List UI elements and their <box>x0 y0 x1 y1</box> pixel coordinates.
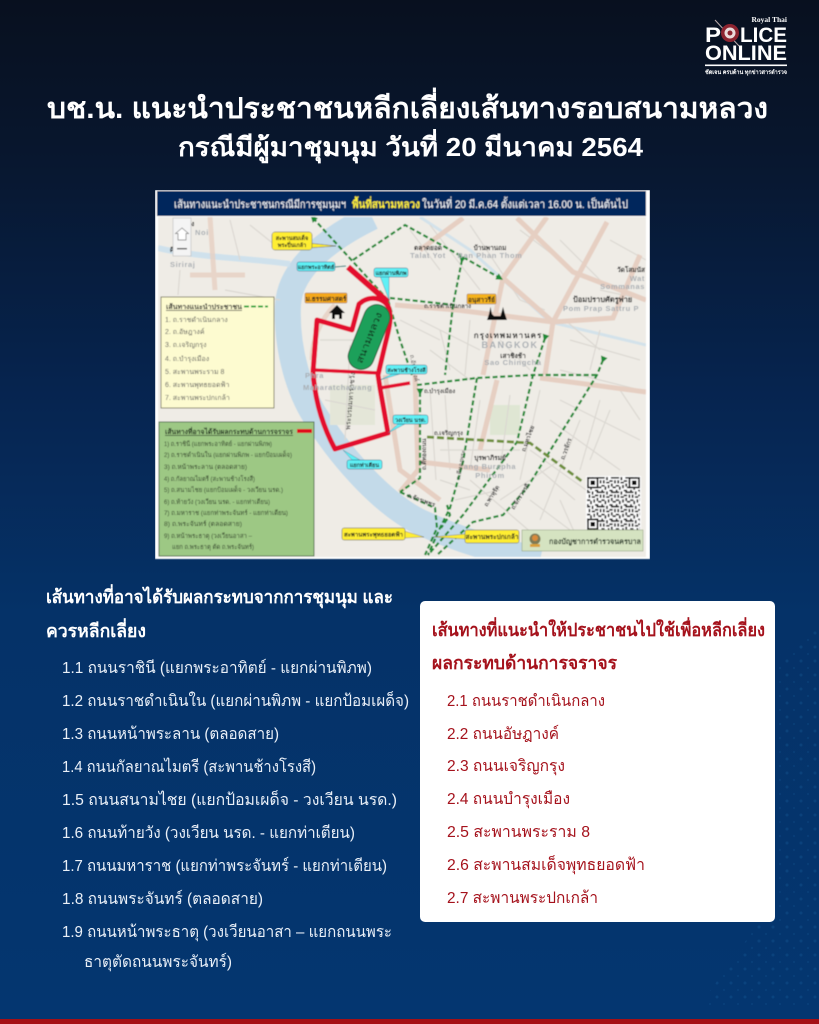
title <box>47 87 768 164</box>
map place names: ถ.มหาไชย <box>519 424 536 453</box>
logo: Royal Thai Police Online: LICE <box>740 24 787 47</box>
callout: Memorial bridge: สะพานพระพุทธยอดฟ้า <box>344 530 403 538</box>
legend: affected routes: แยก ถ.พระธาตุ ตัด ถ.พระจันทร์) <box>172 543 254 551</box>
legend: affected routes: 5) ถ.สนามไชย (แยกป้อมเผด็จ - วงเวียน นรด.) <box>164 485 283 494</box>
map place names: ศิริราช <box>170 246 190 254</box>
list of affected roads: 1.9 ถนนหน้าพระธาตุ (วงเวียนอาสา – แยกถนนพระ <box>62 923 392 942</box>
label: monument <box>467 294 496 304</box>
list of recommended roads: 2.3 ถนนเจริญกรุง <box>447 758 565 776</box>
legend: affected routes: 2) ถ.ราชดำเนินใน (แยกผ่านพิภพ - แยกป้อมเผด็จ) <box>164 450 292 459</box>
list of recommended roads: 2.1 ถนนราชดำเนินกลาง <box>447 693 605 710</box>
affected routes: red <box>313 267 410 449</box>
zoom controls <box>173 218 191 256</box>
map place names: ถ.พาหุรัด <box>482 484 501 508</box>
map place names: ถ.เจริญกรุง <box>434 429 463 437</box>
callout: Phra Pinklao bridge north: พระปิ่นเกล้า <box>277 241 306 249</box>
heading: affected routes <box>46 584 393 641</box>
panel: recommended routes card <box>420 601 775 922</box>
map place names: ถ.ตีทองพระ <box>454 449 467 480</box>
callout: Phra Athit junction: แยกพระอาทิตย์ <box>298 264 334 271</box>
icon: police seal <box>715 20 739 46</box>
map header bar: ในวันที่ 20 มี.ค.64 ตั้งแต่เวลา 16.00 น. เป็นต้นไป <box>422 196 628 211</box>
legend: recommended routes: 6. สะพานพุทธยอดฟ้า <box>165 381 229 389</box>
callout: Phan Phiphop junction: แยกผ่านพิภพ <box>375 270 407 277</box>
map place names: Sommanas <box>600 282 645 291</box>
legend: recommended routes: 5. สะพานพระราม 8 <box>165 369 225 376</box>
legend: affected routes: 9) ถ.หน้าพระธาตุ (วงเวียนอาสา – <box>164 532 252 540</box>
sanam luang green oval <box>347 304 391 371</box>
heading: recommended routes <box>432 617 765 673</box>
map place names: Maharatchawang <box>303 383 372 392</box>
legend: recommended routes: 4. ถ.บำรุงเมือง <box>165 355 209 363</box>
map place names: บ้านพานถม <box>474 243 506 252</box>
legend: affected routes: 7) ถ.มหาราช (แยกท่าพระจันทร์ - แยกท่าเตียน) <box>164 509 288 517</box>
map place names: Talat Yot <box>410 251 446 260</box>
callout: Phan Phiphop junction <box>374 268 408 300</box>
callout: police academy circle: วงเวียน นรด. <box>395 417 426 424</box>
legend: recommended routes: 2. ถ.อัษฎางค์ <box>165 328 205 336</box>
callout: Memorial bridge <box>342 528 424 540</box>
list of recommended roads: 2.4 ถนนบำรุงเมือง <box>447 790 570 809</box>
map place names: Sao Chingcha <box>484 358 542 367</box>
map place names: BANGKOK <box>482 340 538 350</box>
map place names: ang Burapha <box>464 462 516 471</box>
list of recommended roads: 2.5 สะพานพระราม 8 <box>447 824 590 841</box>
legend: recommended routes: 1. ถ.ราชดำเนินกลาง <box>165 316 228 324</box>
legend: recommended routes: 7. สะพานพระปกเกล้า <box>165 394 230 402</box>
list of affected roads: 1.3 ถนนหน้าพระลาน (ตลอดสาย) <box>62 725 279 743</box>
list of recommended roads: 2.2 ถนนอัษฎางค์ <box>447 724 559 743</box>
list of affected roads: 1.8 ถนนพระจันทร์ (ตลอดสาย) <box>62 889 263 908</box>
legend: affected routes <box>159 422 314 556</box>
list of affected roads <box>62 658 409 972</box>
legend: affected routes: 6) ถ.ท้ายวัง (วงเวียน นรด. - แยกท่าเตียน) <box>164 498 270 506</box>
heading: recommended routes: เส้นทางที่แนะนำให้ประชาชนไปใช้เพื่อหลีกเลี่ยง <box>432 617 765 640</box>
map place names: ป้อมปราบศัตรูพ่าย <box>573 295 632 305</box>
list of affected roads: ธาตุตัดถนนพระจันทร์) <box>84 952 232 972</box>
legend: recommended routes: เส้นทางแนะนำประชาชน <box>166 302 242 311</box>
callout: Tha Tian junction: แยกท่าเตียน <box>350 462 379 469</box>
bottom red bar <box>0 1019 819 1024</box>
map place names: ถ.ราชดำเนินกลาง <box>424 302 471 310</box>
logo: Royal Thai Police Online: Royal Thai <box>752 15 787 24</box>
callout: Phra Pinklao bridge north: สะพานสมเด็จ <box>276 234 308 242</box>
panel: affected routes list <box>46 584 409 972</box>
legend: affected routes: 1) ถ.ราชินี (แยกพระอาทิตย์ - แยกผ่านพิภพ) <box>164 440 272 448</box>
icon: temple silhouette <box>487 307 507 320</box>
recommended routes: green dashes <box>313 218 603 555</box>
heading: affected routes: ควรหลีกเลี่ยง <box>46 618 146 641</box>
logo: Royal Thai Police Online: ชัดเจน ครบด้าน ทุกข่าวสารตำรวจ <box>705 68 787 76</box>
map place names: ตลาดยอด <box>414 245 442 252</box>
map place names: วัดโสมนัส <box>617 265 645 274</box>
legend: affected routes: เส้นทางที่อาจได้รับผลกระทบด้านการจราจร <box>165 426 293 436</box>
map place names: Siriraj <box>170 260 195 269</box>
icon: emblem <box>530 534 540 547</box>
map place names: ถ.ตีทองถนน <box>420 438 428 470</box>
map place names: ถ.วรจักร <box>558 436 574 461</box>
legend: recommended routes <box>161 297 274 408</box>
callout: Chang Rong Si bridge <box>380 365 427 380</box>
park greens <box>490 405 520 435</box>
map place names: Noi <box>195 228 209 237</box>
map place names: วังหลัง <box>176 220 194 228</box>
list of affected roads: 1.1 ถนนราชินี (แยกพระอาทิตย์ - แยกผ่านพิภพ) <box>62 658 372 677</box>
logo: Royal Thai Police Online <box>705 15 787 76</box>
main roads <box>483 217 547 375</box>
map header bar: เส้นทางแนะนำประชาชนกรณีมีการชุมนุมฯ <box>174 198 346 211</box>
logo: Royal Thai Police Online: ONLINE <box>705 42 787 65</box>
map place names: ถ.บำรุงเมือง <box>424 387 455 395</box>
title: กรณีมีผู้มาชุมนุม วันที่ 20 มีนาคม 2564 <box>178 128 644 164</box>
map place names: ถ.จักรวรรดิ <box>509 482 531 511</box>
logo: Royal Thai Police Online: P <box>705 24 721 47</box>
map place names: บุรพาภิรมย์ <box>474 454 506 462</box>
list of affected roads: 1.5 ถนนสนามไชย (แยกป้อมเผด็จ - วงเวียน นรด.) <box>62 789 397 809</box>
minor roads <box>178 220 646 545</box>
map place names: Pom Prap Sattru P <box>563 304 639 313</box>
map panel <box>155 190 650 560</box>
map header bar: พื้นที่สนามหลวง <box>352 196 420 211</box>
map place names: ถ.จักรเพชร <box>406 491 437 509</box>
legend: affected routes: 8) ถ.พระจันทร์ (ตลอดสาย) <box>164 520 242 528</box>
list of affected roads: 1.2 ถนนราชดำเนินใน (แยกผ่านพิภพ - แยกป้อมเผด็จ) <box>62 690 409 710</box>
map place names: Ban Phan Thom <box>458 251 522 260</box>
list of affected roads: 1.6 ถนนท้ายวัง (วงเวียน นรด. - แยกท่าเตียน) <box>62 824 355 842</box>
river <box>288 217 540 560</box>
sanam luang green oval: สนามหลวง <box>354 311 385 365</box>
base map <box>158 217 646 560</box>
label: Thammasat University <box>305 293 347 303</box>
map place names <box>170 220 645 511</box>
callout: Phra Pinklao bridge north <box>272 232 336 250</box>
map place names: Phirom <box>475 471 505 480</box>
callout: Tha Tian junction <box>343 450 382 469</box>
legend: affected routes: 4) ถ.กัลยาณไมตรี (สะพานช้างโรงสี) <box>164 475 255 483</box>
callout: Phra Athit junction <box>297 262 346 271</box>
icon: house <box>329 305 345 319</box>
list of recommended roads: 2.7 สะพานพระปกเกล้า <box>447 889 598 907</box>
footer: Metropolitan Police traffic division <box>522 530 643 551</box>
heading: recommended routes: ผลกระทบด้านการจราจร <box>432 653 617 673</box>
map place names: เสาชิงช้า <box>500 351 526 360</box>
map header bar <box>157 191 646 216</box>
callout: police academy circle <box>388 415 428 433</box>
map place names: Phra <box>305 371 324 380</box>
callout: Pokklao bridge <box>433 530 519 543</box>
map place names: กรุงเทพมหานคร <box>474 331 542 341</box>
map place names: พระบรมมหาราชวัง <box>344 372 357 430</box>
heading: affected routes: เส้นทางที่อาจได้รับผลกระทบจากการชุมนุม และ <box>46 584 393 609</box>
legend: recommended routes: 3. ถ.เจริญกรุง <box>165 341 207 349</box>
map place names: ถ.อัษฎางค์ <box>408 354 421 382</box>
label: Thammasat University: ม.ธรรมศาสตร์ <box>306 295 347 303</box>
list of affected roads: 1.7 ถนนมหาราช (แยกท่าพระจันทร์ - แยกท่าเตียน) <box>62 856 387 875</box>
callout: Chang Rong Si bridge: สะพานช้างโรงสี <box>387 366 426 374</box>
footer: Metropolitan Police traffic division: กองบัญชาการตำรวจนครบาล <box>549 537 641 546</box>
label: monument: อนุสาวรีย์ <box>468 296 495 304</box>
list of recommended roads <box>447 693 645 907</box>
QR code <box>586 476 641 531</box>
list of affected roads: 1.4 ถนนกัลยาณไมตรี (สะพานช้างโรงสี) <box>62 757 316 776</box>
map place names: Wat <box>630 274 645 283</box>
list of recommended roads: 2.6 สะพานสมเด็จพุทธยอดฟ้า <box>447 854 645 875</box>
legend: affected routes: 3) ถ.หน้าพระลาน (ตลอดสาย) <box>164 463 247 471</box>
callout: Pokklao bridge: สะพานพระปกเกล้า <box>466 532 519 541</box>
title: บช.น. แนะนำประชาชนหลีกเลี่ยงเส้นทางรอบสนามหลวง <box>47 87 768 125</box>
